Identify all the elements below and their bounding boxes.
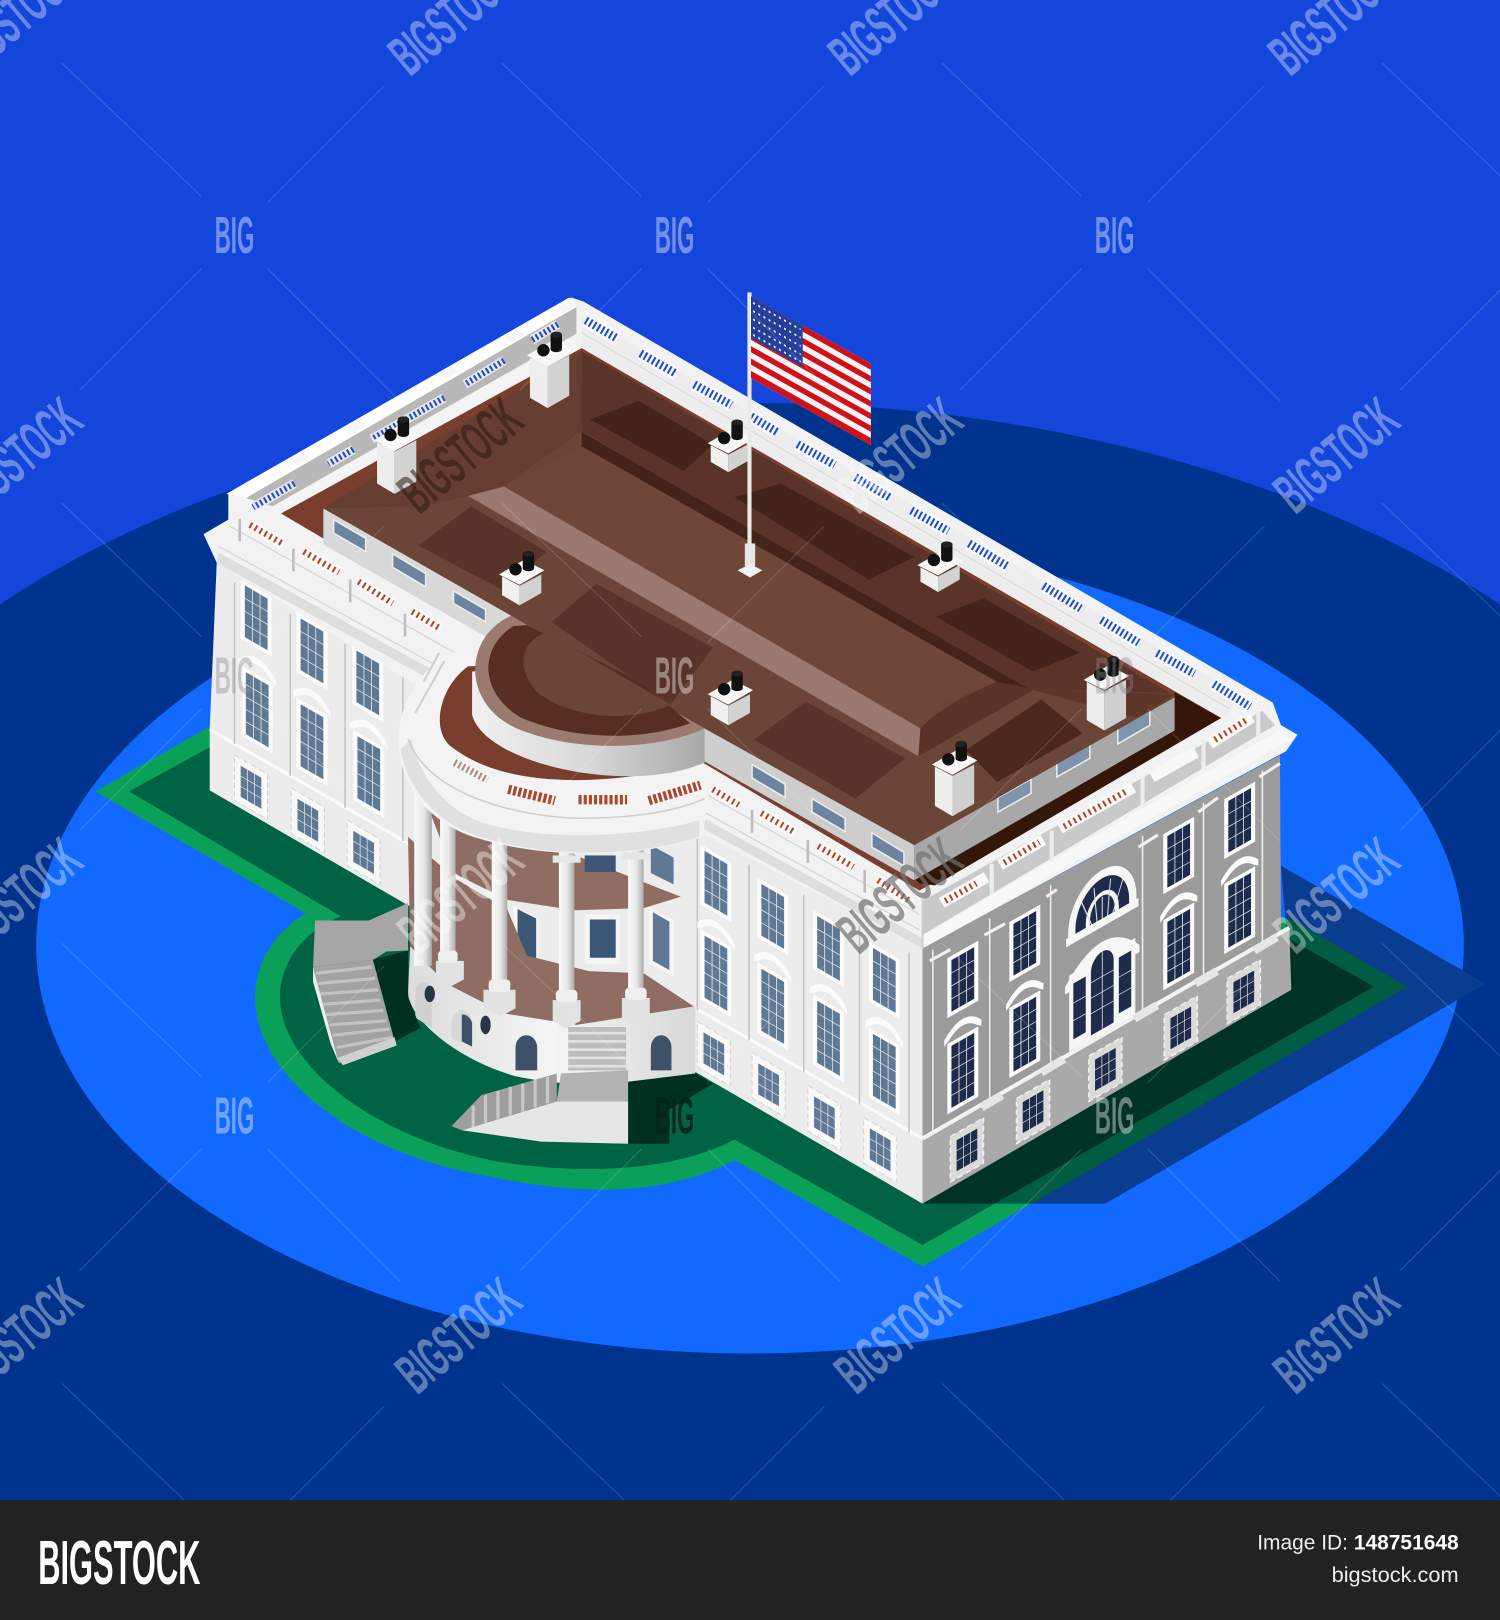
watermark: diagonal BIGSTOCK marks: BIGSTOCK: [1262, 385, 1411, 525]
back parapet faces: [226, 298, 1245, 718]
footer bar: [0, 1500, 1500, 1620]
portico floor: [408, 837, 695, 1025]
watermark: upright BIG marks: BIG: [655, 1088, 694, 1145]
watermark: diagonal BIGSTOCK marks: BIGSTOCK: [825, 385, 974, 525]
roof trough: [281, 348, 1221, 891]
drum arched openings: [415, 982, 671, 1070]
american flag: [751, 297, 871, 445]
watermark: diagonal BIGSTOCK marks: BIGSTOCK: [1262, 1265, 1411, 1405]
ground: light blue ellipse: [36, 537, 1464, 1353]
portico columns: [414, 770, 650, 1029]
watermark: upright BIG marks: BIG: [215, 1088, 254, 1145]
watermark: upright BIG marks: BIG: [215, 648, 254, 705]
chimneys: [374, 332, 1129, 816]
rotunda drum: [472, 661, 705, 776]
watermark: diagonal BIGSTOCK marks: BIGSTOCK: [386, 385, 535, 525]
portico base drum: [408, 946, 695, 1085]
south wall: [210, 558, 923, 1204]
parapet top bumps: [289, 301, 576, 465]
left curved staircase: [313, 903, 420, 1065]
watermark: diagonal BIGSTOCK marks: BIGSTOCK: [383, 1265, 533, 1405]
portico ceiling: [424, 796, 681, 910]
watermark: upright BIG marks: BIG: [655, 648, 694, 705]
watermark: upright BIG marks: BIG: [1095, 1088, 1134, 1145]
roof side walls with skylights: [323, 508, 1175, 880]
building shadow: [923, 866, 1486, 1204]
watermark: diagonal BIGSTOCK marks: BIGSTOCK: [1262, 825, 1411, 965]
lawn: [129, 746, 1374, 1245]
portico balcony ring: [399, 649, 713, 854]
watermark: diagonal BIGSTOCK marks: BIGSTOCK: [386, 825, 535, 965]
portico interior wall: [410, 785, 695, 1018]
watermark: diagonal BIGSTOCK marks: BIGSTOCK: [823, 1265, 972, 1405]
watermark: upright BIG marks: BIG: [655, 208, 694, 265]
rotunda roof: [475, 616, 705, 746]
watermark: diagonal BIGSTOCK marks: BIGSTOCK: [825, 825, 974, 965]
watermark: upright BIG marks: [215, 208, 1134, 1145]
drum lamps: [425, 986, 491, 1034]
front staircase: [451, 1027, 713, 1144]
roof main surface: [323, 351, 1175, 845]
ground: dark blue ellipse: [0, 403, 1500, 1500]
footer site url: bigstock.com: [1332, 1564, 1459, 1587]
lawn border: [95, 725, 1407, 1267]
watermark: upright BIG marks: BIG: [215, 208, 254, 265]
portico windows: [513, 845, 674, 976]
footer image id: Image ID: 148751648: [1257, 1532, 1459, 1555]
footer bar: BIGSTOCK: [38, 1529, 201, 1598]
parapet and cornice outer shell: [204, 298, 1298, 948]
east wall central door and fan window: [1065, 849, 1139, 1054]
flag pole: [738, 292, 762, 578]
east wall windows: [944, 782, 1260, 1182]
parapet baluster panels: [250, 320, 1252, 903]
south wall windows: [235, 579, 903, 1182]
watermark: upright BIG marks: BIG: [1095, 208, 1134, 265]
watermark: upright BIG marks: BIG: [1095, 648, 1134, 705]
east wall: [923, 755, 1291, 1204]
